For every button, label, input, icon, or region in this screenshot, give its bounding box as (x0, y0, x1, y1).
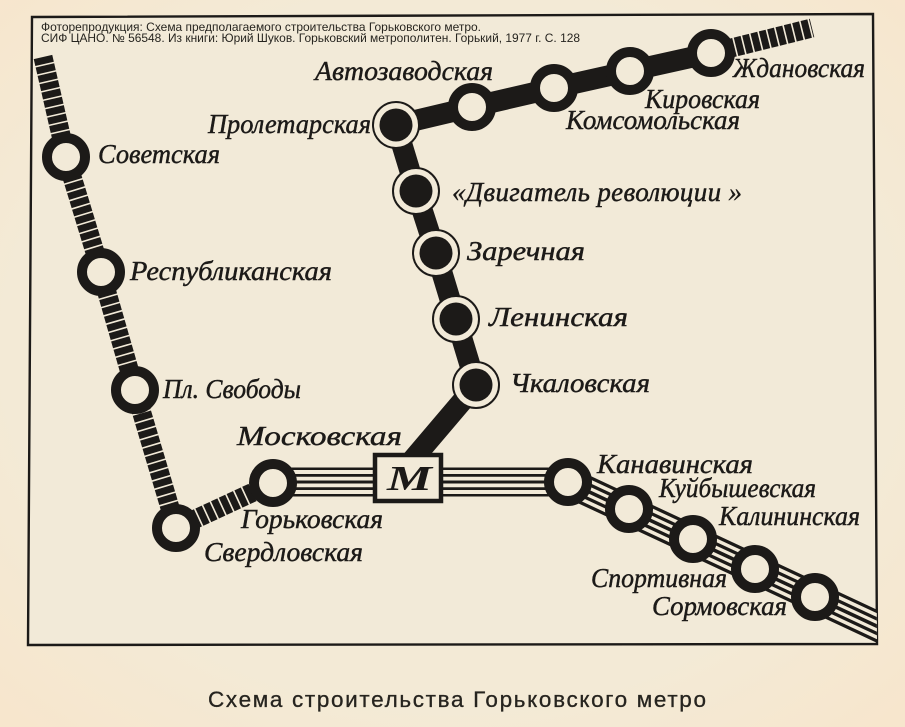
station labels: Канавинская (596, 449, 753, 479)
station labels: Спортивная (591, 563, 727, 593)
station labels: Ленинская (488, 302, 628, 332)
interchange: metro M box: М (386, 459, 435, 498)
station labels: Сормовская (652, 591, 787, 621)
source caption (41, 21, 580, 45)
station labels: «Двигатель революции » (452, 177, 742, 207)
source caption: Фоторепродукция: Схема предполагаемого строительства Горьковского метро. (41, 21, 481, 34)
station labels: Ждановская (732, 53, 865, 83)
station labels: Кировская (644, 84, 760, 114)
station labels: Горьковская (240, 504, 383, 534)
station labels: Автозаводская (313, 56, 493, 86)
station labels: Свердловская (204, 537, 363, 567)
station labels: Республиканская (129, 256, 332, 286)
station labels: Куйбышевская (658, 473, 816, 503)
interchange: metro M box (375, 455, 441, 501)
station labels: Советская (98, 139, 220, 169)
title: Схема строительства Горьковского метро (208, 687, 706, 712)
source caption: СИФ ЦАНО. № 56548. Из книги: Юрий Шуков. Горьковский метрополитен. Горький, 1977 г. С. 128 (41, 32, 580, 45)
station labels: Московская (236, 421, 402, 451)
line: five-track diagonal section (568, 482, 900, 637)
stations: filled discs (373, 102, 499, 408)
line: planned dashed section, east (711, 28, 812, 53)
line: five-track horizontal section (273, 468, 568, 496)
station labels (98, 53, 865, 621)
station labels: Чкаловская (510, 368, 650, 398)
station labels: Калининская (718, 501, 860, 531)
line: planned dashed section, west (43, 57, 273, 528)
station labels: Пл. Свободы (162, 374, 301, 404)
stations: open rings (47, 34, 834, 616)
station labels: Комсомольская (565, 105, 740, 135)
line: solid north section (396, 53, 711, 465)
station labels: Пролетарская (207, 109, 371, 139)
station labels: Заречная (467, 236, 585, 266)
